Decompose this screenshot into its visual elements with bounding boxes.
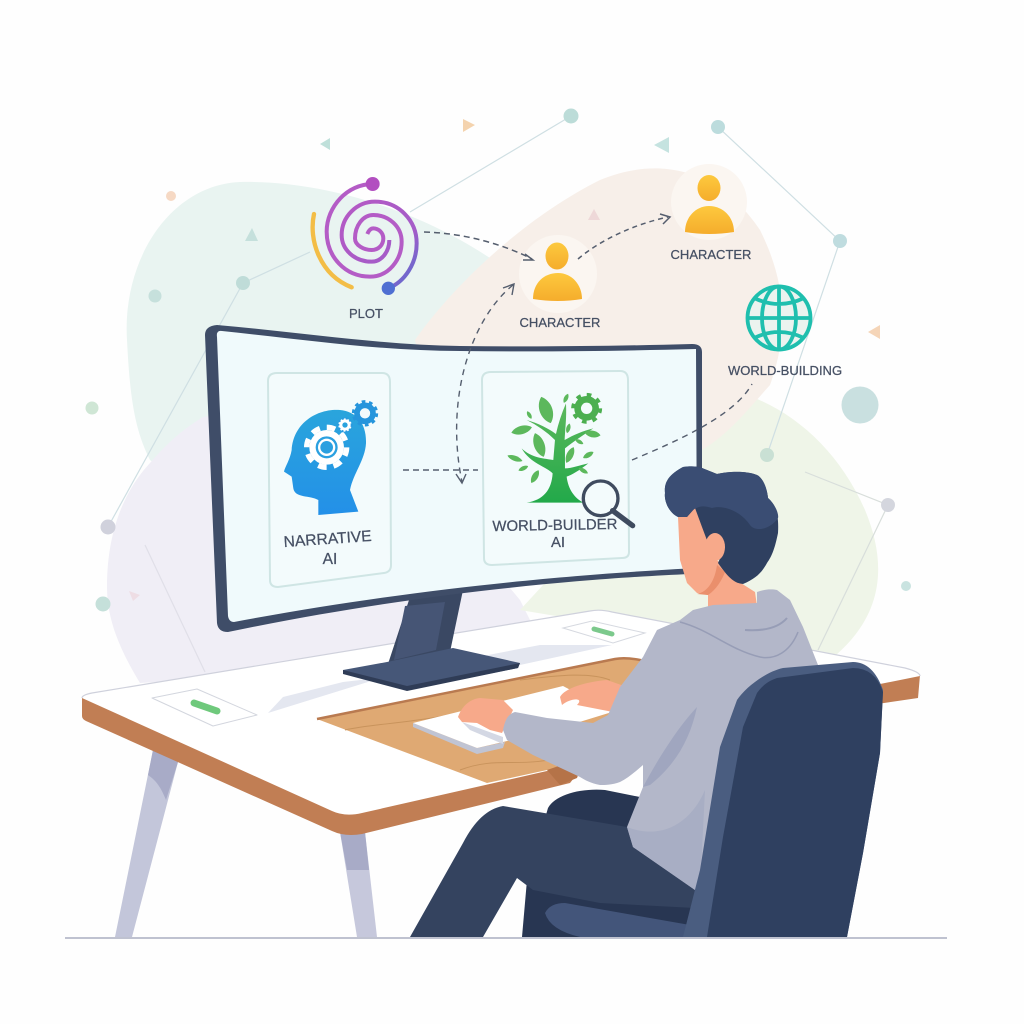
- person: near leg: [410, 806, 695, 937]
- label: character one: CHARACTER: [520, 315, 600, 330]
- person: hands: [458, 680, 627, 733]
- icon: magnifier: [583, 481, 633, 526]
- monitor stand: [343, 590, 520, 691]
- label: narrative AI: NARRATIVE: [283, 528, 372, 551]
- dashed arrows on screen: [403, 284, 752, 483]
- desk shadow: [268, 645, 612, 713]
- label: AI line two: AI: [551, 535, 565, 551]
- icon: character two: [671, 164, 747, 240]
- label: world-building: WORLD-BUILDING: [728, 363, 842, 378]
- right desk pad: [563, 621, 645, 643]
- label: world-builder AI: WORLD-BUILDER: [492, 517, 618, 535]
- icon: globe: [748, 286, 811, 350]
- card: world-builder AI: [482, 371, 633, 565]
- wood mat: [317, 658, 660, 783]
- label: plot: PLOT: [349, 306, 383, 321]
- icon: character one: [519, 235, 597, 313]
- label: character two: CHARACTER: [671, 247, 751, 262]
- person: far leg and seat: [522, 790, 710, 937]
- icon: green gear: [573, 395, 600, 422]
- background blobs: [107, 168, 878, 683]
- person: hair: [665, 466, 778, 584]
- left desk pad: [152, 689, 257, 726]
- desk legs: [115, 750, 377, 937]
- dashed arrows between topics: [424, 214, 670, 260]
- network lines: [108, 116, 888, 672]
- person: jaw shadow: [697, 565, 725, 595]
- monitor: [205, 325, 702, 632]
- chair: [683, 662, 883, 937]
- icon: head with gears: [284, 402, 377, 515]
- person: neck and face: [678, 505, 757, 608]
- icon: tree: [507, 393, 633, 526]
- label: AI: AI: [323, 551, 337, 568]
- screen: [217, 331, 697, 622]
- icon: plot spiral: [313, 177, 417, 295]
- ground line: [65, 937, 947, 939]
- keyboard: [413, 686, 612, 754]
- network nodes: [86, 108, 911, 612]
- desk: [82, 610, 920, 835]
- person: hoodie: [503, 589, 820, 890]
- decorative triangles: [129, 119, 880, 601]
- card: narrative AI: [268, 373, 391, 587]
- person: ear: [705, 533, 725, 561]
